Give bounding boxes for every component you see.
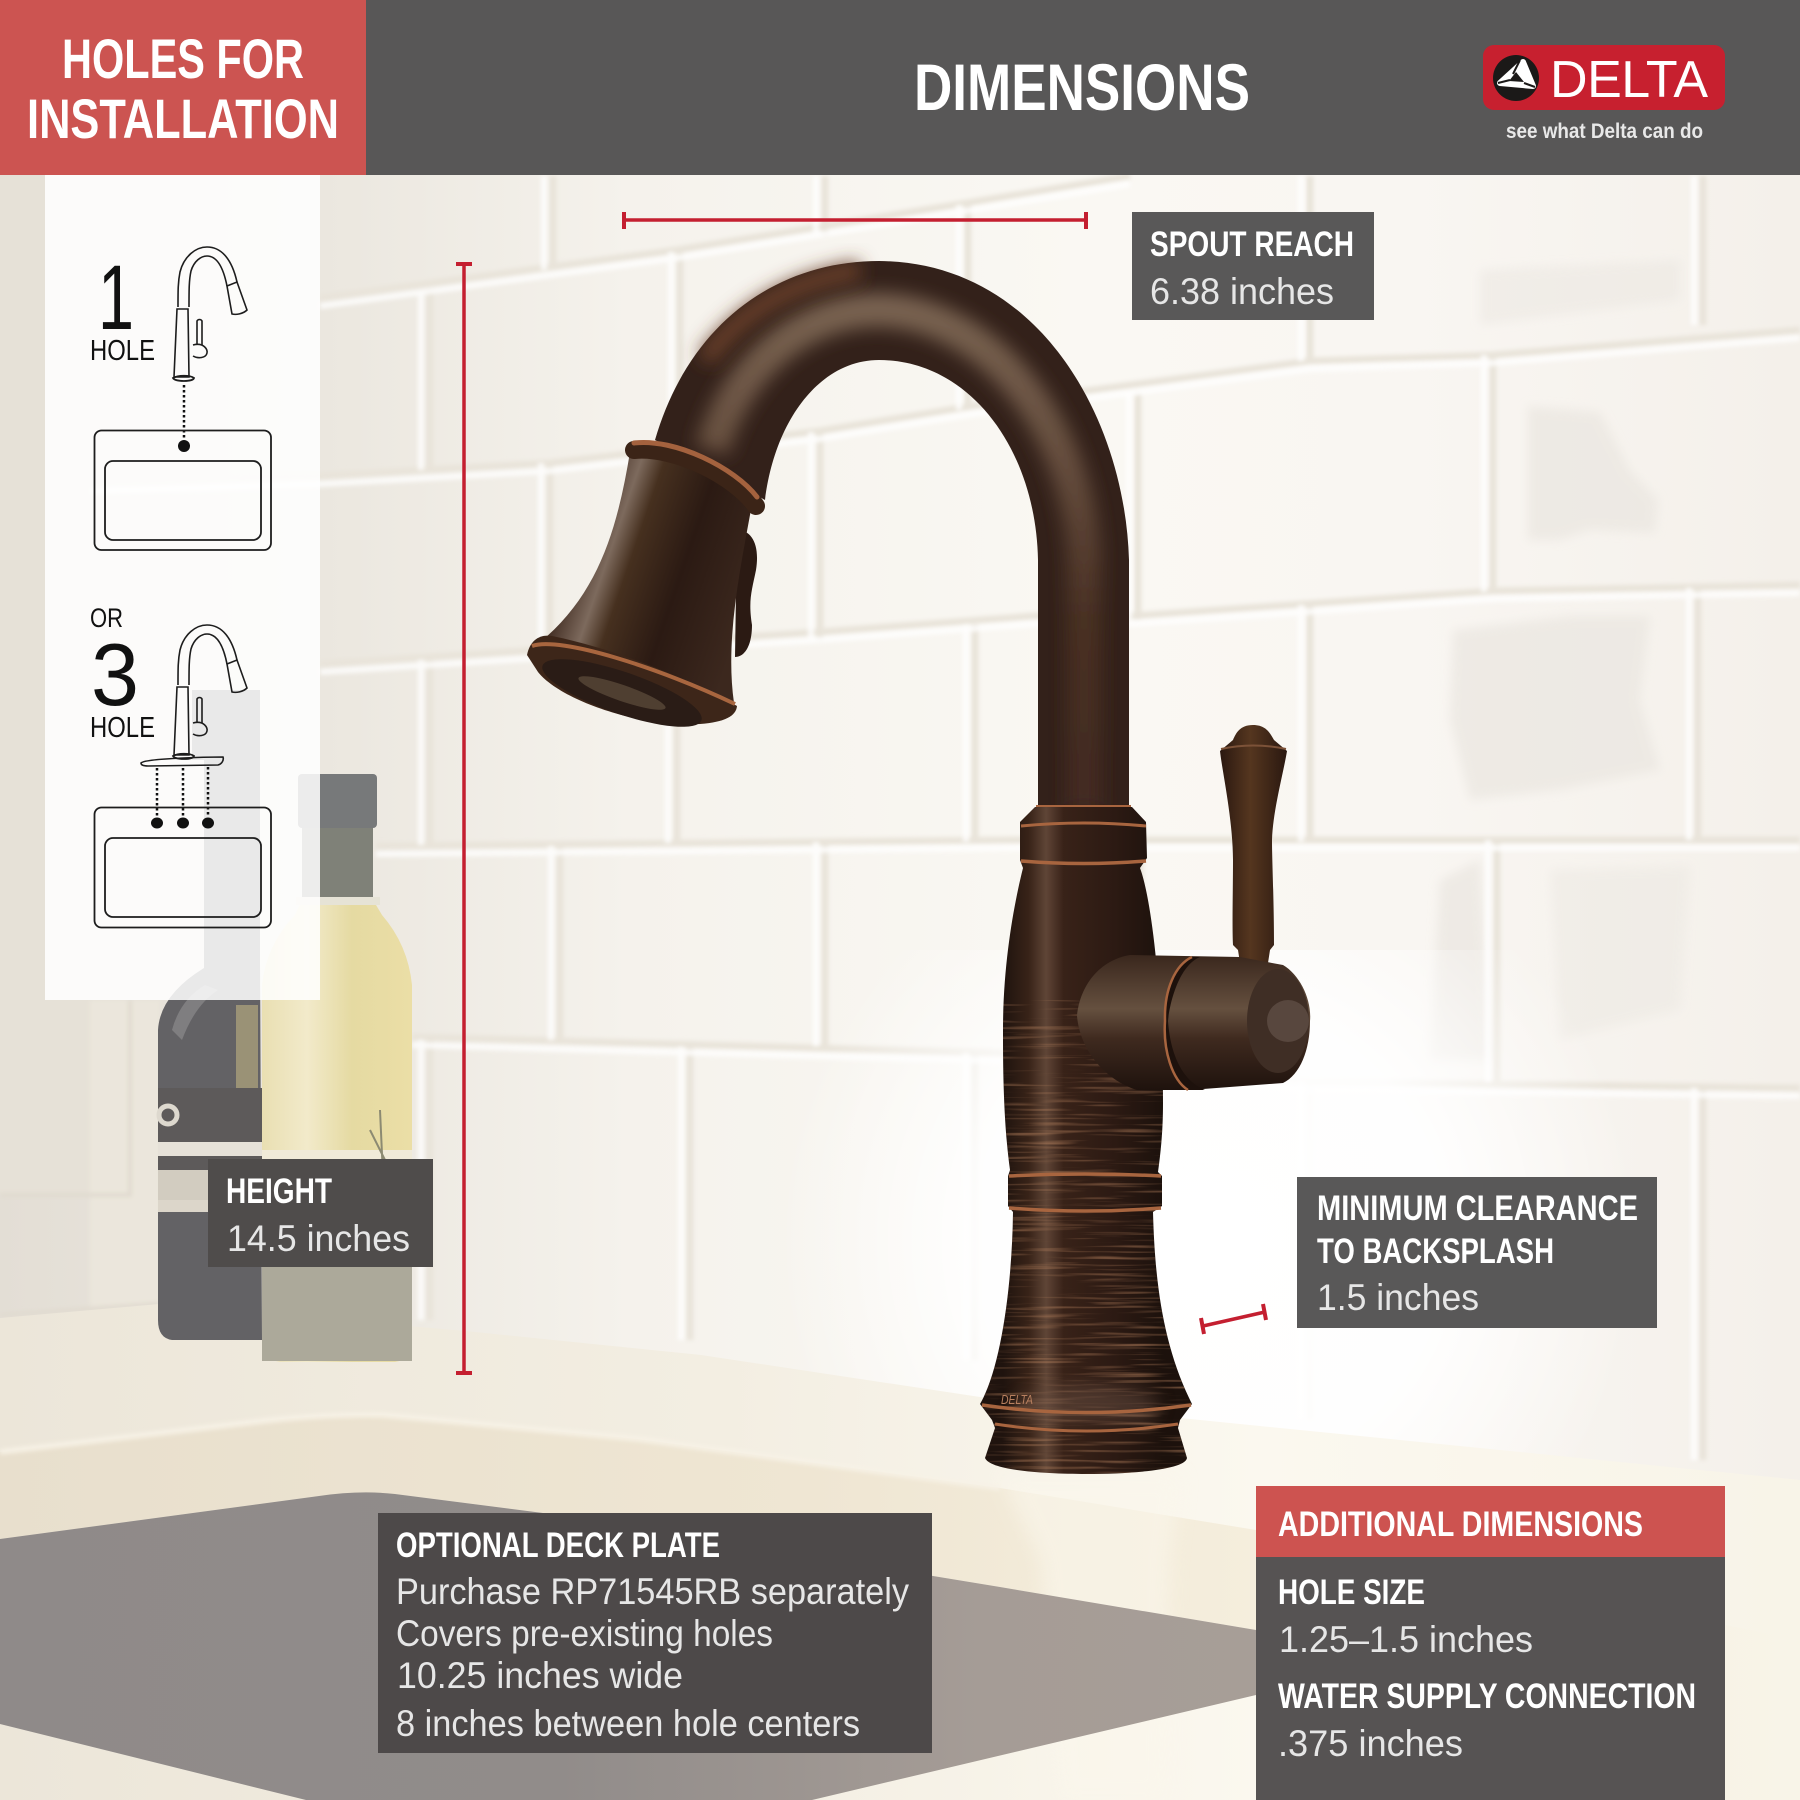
panel heading: holes for installation [0,0,366,175]
panel: additional dimensions: .375 inches [1278,1723,1463,1764]
callout: optional deck plate: 8 inches between hole centers [396,1703,860,1744]
faucet: pull-down sprayer [527,442,757,740]
option: 1 hole [90,247,271,550]
option: 3 hole: OR [90,603,123,633]
counter top [0,1304,1800,1800]
panel: hole options [45,175,320,1000]
callout: minimum clearance: MINIMUM CLEARANCE [1317,1189,1638,1228]
callout: optional deck plate: Covers pre-existing holes [396,1613,773,1654]
faucet: DELTA base mark: DELTA [1001,1392,1033,1407]
olive oil bottle [262,774,412,1362]
option: 3 hole: HOLE [90,712,155,744]
faucet [527,261,1310,1477]
panel: additional dimensions: WATER SUPPLY CONNECTION [1278,1677,1696,1716]
panel: additional dimensions [1256,1486,1725,1800]
callout: height: 14.5 inches [227,1218,410,1259]
dimension line: minimum clearance [1201,1304,1266,1334]
callout: minimum clearance: TO BACKSPLASH [1317,1232,1554,1271]
heading: dimensions: DIMENSIONS [914,50,1250,124]
panel heading: additional dimensions: ADDITIONAL DIMENSIONS [1278,1505,1643,1544]
callout: optional deck plate: Purchase RP71545RB separately [396,1571,909,1612]
panel: additional dimensions: 1.25–1.5 inches [1279,1619,1533,1660]
header bar [366,0,1800,175]
callout: spout reach: SPOUT REACH [1150,225,1354,264]
option: 3 hole: 3 [91,625,139,724]
panel heading: holes for installation: INSTALLATION [27,87,339,150]
callout: minimum clearance: 1.5 inches [1317,1277,1479,1318]
faucet: gooseneck spout [655,261,1129,810]
option: 1 hole: 1 [98,247,134,349]
faucet: body and base [980,806,1195,1477]
panel heading: additional dimensions [1256,1486,1725,1557]
logo: delta: DELTA [1550,51,1708,109]
tagline: see what Delta can do [1506,120,1703,143]
background: left cabinet [0,175,160,1315]
callout: spout reach [1132,212,1374,320]
callout: height: HEIGHT [226,1172,332,1211]
panel: additional dimensions: HOLE SIZE [1278,1573,1425,1612]
panel heading: holes for installation: HOLES FOR [62,27,304,90]
callout: minimum clearance [1297,1177,1657,1328]
option: 1 hole: HOLE [90,335,155,367]
logo: delta [1483,45,1725,143]
callout: optional deck plate: OPTIONAL DECK PLATE [396,1526,720,1565]
faucet: handle [1077,725,1310,1090]
dimension line: spout reach [624,212,1086,229]
callout: spout reach: 6.38 inches [1150,271,1334,312]
callout: height [208,1159,433,1267]
dark vinegar bottle [158,690,262,1340]
dimension line: height [456,264,472,1373]
option: 3 hole [90,603,271,928]
icon: delta emblem [1493,55,1539,101]
sink basin [0,1492,1420,1800]
callout: optional deck plate [378,1513,932,1753]
callout: optional deck plate: 10.25 inches wide [397,1655,683,1696]
